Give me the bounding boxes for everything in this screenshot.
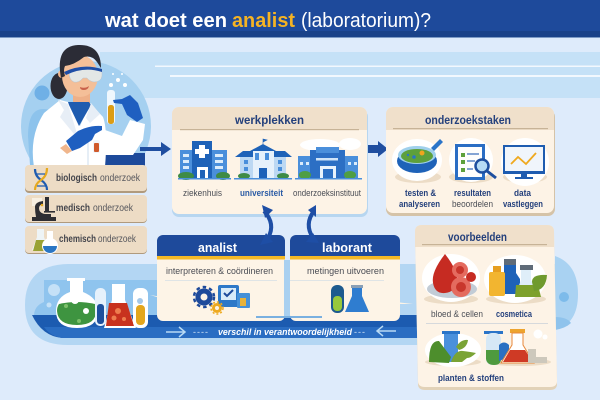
icon: tube yellow (133, 288, 148, 328)
icon: cosmetica (484, 255, 547, 304)
title banner: analist (232, 10, 295, 32)
caption: verschil in verantwoordelijkheid: ---- (193, 327, 209, 337)
caption: verschil in verantwoordelijkheid (166, 326, 396, 337)
background band with glassware (25, 256, 578, 345)
icon: flasks (32, 229, 58, 254)
chip: medisch onderzoek: medisch (56, 203, 90, 214)
icon: petri dish (392, 139, 443, 183)
panel: laborant: laborant (322, 240, 373, 255)
panel: voorbeelden (415, 225, 557, 390)
icon: universiteit (234, 139, 292, 180)
panel: voorbeelden: bloed & cellen (431, 309, 483, 320)
panel: onderzoekstaken: onderzoekstaken (425, 113, 511, 127)
icon: bloed en cellen (422, 254, 480, 304)
panel: werkplekken: ziekenhuis (183, 188, 222, 198)
chip: chemisch onderzoek (25, 226, 147, 254)
icon: tube blue (95, 288, 106, 326)
panel: onderzoekstaken: resultaten (454, 188, 491, 198)
icon: planten (425, 331, 481, 367)
illustration: scientist (21, 45, 151, 166)
icon: dna (35, 168, 47, 190)
icon: green round flask (56, 278, 98, 328)
panel: werkplekken: werkplekken (234, 113, 304, 127)
chip: chemisch onderzoek: onderzoek (98, 234, 137, 245)
icon: gears and clipboard (194, 285, 250, 314)
panel: onderzoekstaken: testen & (405, 188, 436, 198)
icon: monitor chart (501, 138, 549, 186)
chip: medisch onderzoek (25, 195, 147, 223)
panel: analist: analist (198, 240, 238, 255)
title banner: wat doet een (104, 10, 227, 32)
chip: chemisch onderzoek: chemisch (59, 234, 96, 245)
panel: onderzoekstaken: vastleggen (503, 199, 543, 209)
panel: werkplekken: onderzoeksinstituut (293, 188, 361, 198)
chip: biologisch onderzoek: onderzoek (100, 173, 141, 184)
panel: voorbeelden: voorbeelden (448, 230, 507, 244)
panel: voorbeelden: cosmetica (496, 309, 533, 320)
caption: verschil in verantwoordelijkheid: verschil in verantwoordelijkheid (218, 327, 352, 337)
icon: tube and flask (331, 285, 369, 313)
icon: ziekenhuis (178, 141, 231, 180)
panel: onderzoekstaken: data (514, 188, 532, 198)
arrow: left curved double arrow (260, 205, 273, 245)
icon: onderzoeksinstituut (295, 138, 362, 180)
icon: stoffen (484, 329, 551, 366)
panel: laborant (290, 235, 413, 321)
panel: onderzoekstaken: analyseren (399, 199, 440, 209)
panel: onderzoekstaken: beoordelen (452, 199, 493, 209)
arrow: werkplekken to onderzoekstaken (367, 141, 388, 157)
panel: analist: interpreteren & coördineren (166, 266, 273, 277)
arrow: scientist to werkplekken (140, 142, 171, 156)
title banner (0, 0, 600, 38)
panel: voorbeelden: planten & stoffen (438, 373, 504, 384)
icon: report with magnifier (449, 138, 496, 183)
icon: microscope (32, 197, 56, 221)
chip: medisch onderzoek: onderzoek (93, 203, 134, 214)
icon: red conical flask (104, 284, 136, 328)
panel: analist (150, 235, 285, 321)
panel: werkplekken (172, 107, 368, 217)
panel: laborant: metingen uitvoeren (307, 266, 384, 277)
chip: biologisch onderzoek (25, 165, 147, 193)
title banner: (laboratorium)? (301, 10, 431, 32)
panel: onderzoekstaken (386, 107, 555, 216)
panel: werkplekken: universiteit (240, 188, 283, 198)
chip: biologisch onderzoek: biologisch (56, 173, 97, 184)
arrow: right curved double arrow (306, 205, 319, 243)
caption: verschil in verantwoordelijkheid: --- (354, 327, 366, 337)
